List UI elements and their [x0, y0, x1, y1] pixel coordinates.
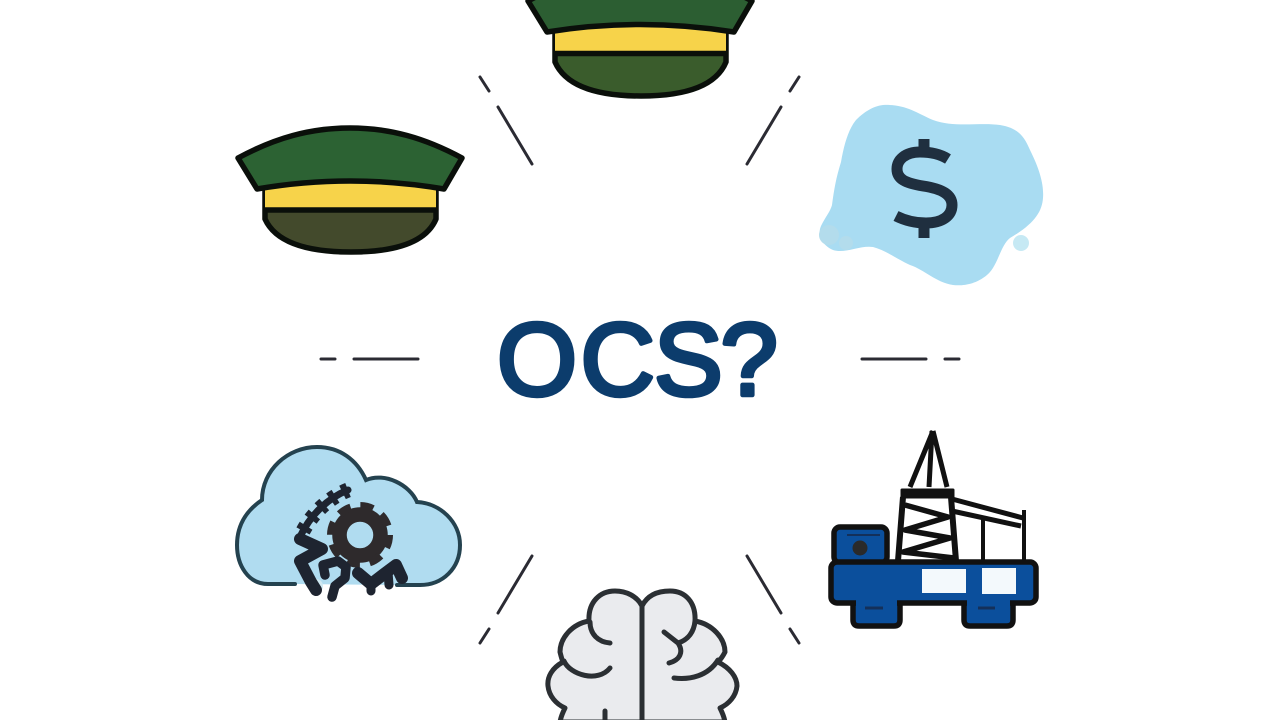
icon: dollar on blue blob [819, 105, 1043, 285]
cabin [834, 527, 887, 563]
blue paint blob [820, 105, 1043, 285]
hull [831, 562, 1036, 603]
broken gear fragments [300, 490, 402, 597]
icon: offshore oil rig [831, 431, 1036, 626]
pale spot [309, 579, 323, 593]
icon: officer cap, top [528, 0, 752, 96]
derrick tower [898, 490, 956, 561]
gear [331, 506, 389, 564]
icon: cloud with gears [237, 447, 460, 597]
windows [922, 569, 966, 593]
derrick spire [910, 431, 947, 487]
crane arm [952, 499, 1024, 562]
brain folds [564, 621, 718, 720]
icon: brain [548, 591, 737, 720]
cabin detail [847, 535, 880, 556]
cloud [237, 447, 460, 585]
leg slots [865, 606, 995, 610]
legs [853, 600, 1013, 626]
small pale blob [1013, 235, 1029, 251]
title: OCS? [497, 302, 778, 417]
left lobe [548, 591, 642, 720]
right lobe [642, 591, 737, 720]
leg cover [856, 600, 1010, 606]
dollar symbol [896, 139, 952, 238]
icon: officer cap, left [238, 128, 462, 252]
radial dashes [321, 77, 959, 643]
pale blob lumps [819, 225, 853, 250]
